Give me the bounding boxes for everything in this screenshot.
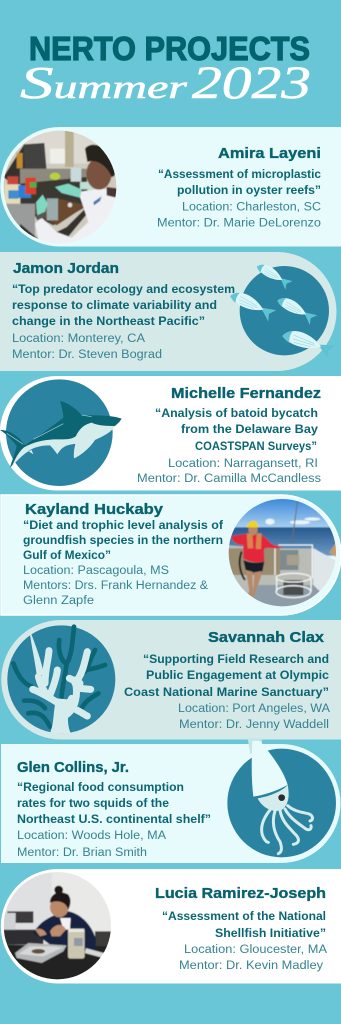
project details: from the Delaware Bay (181, 424, 319, 436)
project details: “Supporting Field Research and (143, 654, 329, 666)
project details (162, 911, 327, 972)
project details: Mentor: Dr. Steven Bograd (12, 349, 162, 361)
project details (157, 169, 322, 230)
project details: Glenn Zapfe (23, 595, 94, 607)
panel: Michelle Fernandez (0, 376, 341, 490)
project details: pollution in oyster reefs” (177, 185, 321, 197)
project details (23, 520, 223, 607)
project details: Mentor: Dr. Kevin Madley (179, 960, 323, 972)
project details: “Diet and trophic level analysis of (23, 520, 223, 532)
panel: Lucia Ramirez-Joseph (0, 868, 341, 984)
name: Amira Layeni (218, 145, 321, 162)
project details: Public Engagement at Olympic (146, 670, 330, 682)
name: Kayland Huckaby (25, 501, 164, 518)
project details: Location: Port Angeles, WA (178, 703, 330, 715)
name: Jamon Jordan (13, 260, 119, 277)
project details: rates for two squids of the (17, 798, 169, 810)
project details: Location: Monterey, CA (12, 333, 145, 345)
project details: Mentor: Dr. Jenny Waddell (179, 719, 329, 731)
illustration: squid circle (227, 738, 336, 857)
name: Savannah Clax (208, 629, 325, 646)
project details: response to climate variability and (12, 300, 217, 312)
title (20, 30, 311, 109)
project details: Location: Gloucester, MA (184, 944, 327, 956)
project details: Mentors: Drs. Frank Hernandez & (23, 580, 208, 592)
project details: Mentor: Dr. Brian Smith (17, 847, 147, 859)
title: NERTO PROJECTS (29, 30, 310, 67)
project details: Mentor: Dr. Camilla McCandless (137, 473, 321, 485)
photo: ship deck (228, 499, 336, 606)
project details: groundfish species in the northern (23, 535, 223, 547)
project details: Shellfish Initiative” (215, 928, 326, 940)
panel: Jamon Jordan (0, 252, 337, 371)
name: Michelle Fernandez (171, 385, 321, 402)
project details (137, 408, 321, 485)
project details: Mentor: Dr. Marie DeLorenzo (157, 218, 321, 230)
project details: “Regional food consumption (17, 782, 184, 794)
panel: Savannah Clax (1, 620, 341, 740)
photo: lab work (4, 130, 116, 243)
illustration: fish circle (226, 262, 337, 360)
name: Glen Collins, Jr. (17, 759, 129, 776)
panel: Glen Collins, Jr. (1, 738, 340, 863)
project details: Location: Narragansett, RI (168, 458, 318, 470)
illustration: coral circle (7, 625, 115, 733)
project details (124, 654, 330, 731)
project details: Coast National Marine Sanctuary” (124, 687, 329, 699)
panel: Kayland Huckaby (1, 495, 341, 615)
project details: Location: Pascagoula, MS (23, 565, 169, 577)
illustration: shark circle (0, 379, 122, 486)
project details: change in the Northeast Pacific” (12, 316, 205, 328)
panel: Amira Layeni (0, 127, 341, 247)
photo: lab bench (4, 872, 111, 980)
title: S ummer (20, 57, 187, 108)
project details: Location: Charleston, SC (182, 202, 321, 214)
name: Lucia Ramirez-Joseph (155, 885, 326, 902)
project details: “Assessment of the National (162, 911, 326, 923)
title: 2023 (192, 57, 311, 109)
project details: “Assessment of microplastic (158, 169, 322, 181)
project details (17, 782, 211, 859)
project details: Gulf of Mexico” (23, 550, 111, 562)
project details: COASTSPAN Surveys” (195, 441, 317, 453)
project details: Northeast U.S. continental shelf” (17, 814, 211, 826)
project details: “Analysis of batoid bycatch (155, 408, 318, 420)
project details: “Top predator ecology and ecosystem (12, 284, 235, 296)
project details: Location: Woods Hole, MA (17, 830, 166, 842)
project details (12, 284, 235, 361)
